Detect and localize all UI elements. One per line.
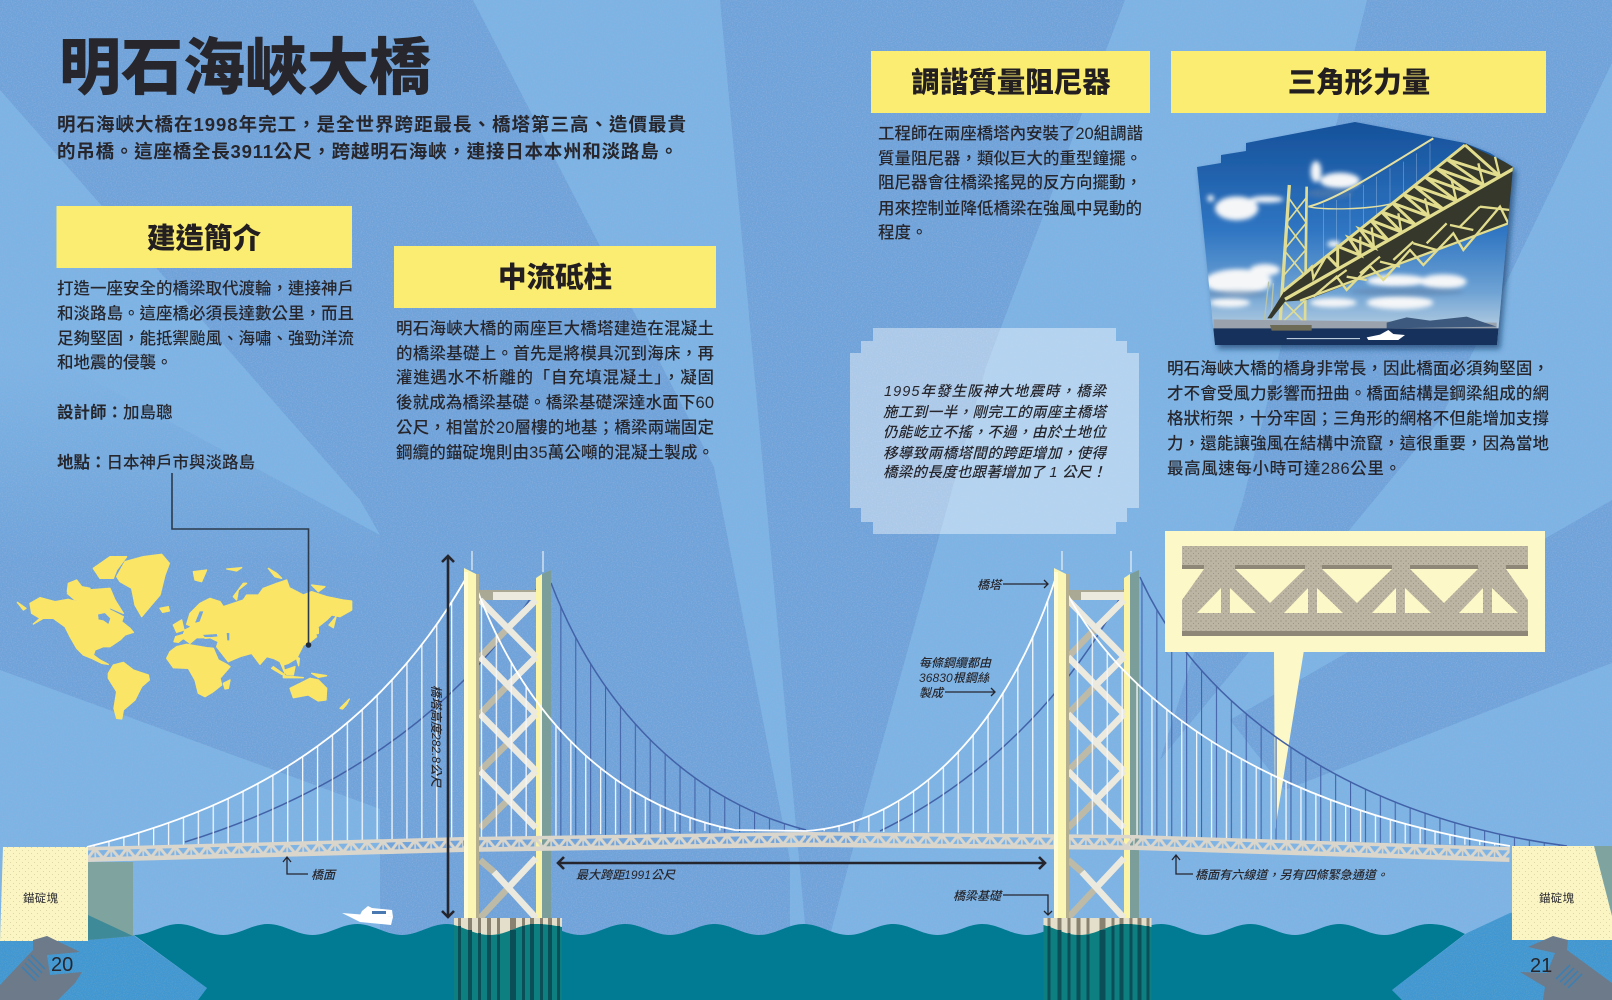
heading: 調諧質量阻尼器: 調諧質量阻尼器 <box>911 67 1111 99</box>
tower height arrow <box>442 556 454 917</box>
land: right shore <box>1392 900 1612 1000</box>
heading: 調諧質量阻尼器 <box>871 51 1150 113</box>
truss detail callout <box>1165 531 1545 652</box>
earthquake note panel: 橋梁的長度也跟著增加了 1 公尺！ <box>883 464 1106 481</box>
page number 21: 21 <box>1530 955 1552 977</box>
text: 建造簡介: 地點：日本神戶市與淡路島 <box>57 453 255 472</box>
bridge deck truss <box>87 832 1510 862</box>
left anchor block <box>0 847 88 941</box>
earthquake note panel: 1995年發生阪神大地震時，橋梁 <box>884 383 1108 400</box>
water <box>134 924 1465 1000</box>
right pier <box>1044 918 1152 1000</box>
foundation label and arrow: 橋梁基礎 <box>953 889 1003 903</box>
intro text <box>57 114 686 162</box>
earthquake note panel: 施工到一半，剛完工的兩座主橋塔 <box>883 404 1108 421</box>
text: 調諧質量阻尼器: 質量阻尼器，類似巨大的重型鐘擺。 <box>878 149 1142 168</box>
photo of the bridge <box>1193 117 1520 350</box>
text: 調諧質量阻尼器: 工程師在兩座橋塔內安裝了20組調諧 <box>878 123 1143 143</box>
tower height label: 橋塔高度282.8公尺 <box>429 685 443 788</box>
heading: 三角形力量: 三角形力量 <box>1288 67 1430 99</box>
cable label and arrow <box>919 656 995 700</box>
text: 建造簡介: 設計師：加島聰 <box>57 402 173 422</box>
heading: 建造簡介: 建造簡介 <box>147 222 261 255</box>
wrench right <box>1520 936 1612 1000</box>
heading: 三角形力量 <box>1171 51 1546 113</box>
text: 建造簡介: 打造一座安全的橋梁取代渡輪，連接神戶 <box>57 278 354 298</box>
text: 調諧質量阻尼器 <box>878 123 1143 242</box>
text: 建造簡介: 足夠堅固，能抵禦颱風、海嘯、強勁洋流 <box>57 328 354 348</box>
right anchor block: 錨碇塊 <box>1539 891 1574 905</box>
left tower front column <box>464 551 479 918</box>
left anchor side face <box>88 862 133 940</box>
left anchor block: 錨碇塊 <box>23 891 58 905</box>
main cables and hangers <box>87 580 1510 847</box>
right anchor block <box>1512 846 1612 940</box>
earthquake note panel <box>850 328 1139 534</box>
text: 三角形力量: 才不會受風力影響而扭曲。橋面結構是鋼梁組成的網 <box>1167 383 1549 403</box>
text: 三角形力量: 格狀桁架，十分牢固；三角形的網格不但能增加支撐 <box>1167 409 1549 428</box>
deck lanes label and arrow <box>1172 855 1388 882</box>
left tower back column and lattice <box>479 551 551 918</box>
earthquake note panel: 仍能屹立不搖，不過，由於土地位 <box>883 424 1108 441</box>
text: 中流砥柱: 的橋梁基礎上。首先是將模具沉到海床，再 <box>396 344 714 363</box>
earthquake note panel: 移導致兩橋塔間的跨距增加，使得 <box>883 445 1108 462</box>
heading: 中流砥柱 <box>394 246 716 308</box>
heading: 中流砥柱: 中流砥柱 <box>498 261 612 294</box>
deck lanes label and arrow: 橋面有六線道，另有四條緊急通道。 <box>1195 868 1388 882</box>
intro text: 的吊橋。這座橋全長3911公尺，跨越明石海峽，連接日本本州和淡路島。 <box>57 141 678 162</box>
land: left shore <box>0 935 207 1000</box>
right tower front column <box>1054 551 1069 918</box>
text: 中流砥柱: 後就成為橋梁基礎。橋梁基礎深達水面下60 <box>396 393 714 412</box>
text: 中流砥柱: 公尺，相當於20層樓的地基；橋梁兩端固定 <box>396 417 714 437</box>
tower label and arrow: 橋塔 <box>977 578 1003 592</box>
text: 中流砥柱 <box>396 319 714 462</box>
leader line from location to Japan <box>172 473 311 648</box>
text: 調諧質量阻尼器: 用來控制並降低橋梁在強風中晃動的 <box>878 199 1142 218</box>
cable label and arrow: 每條鋼纜都由 <box>919 656 992 670</box>
tower label and arrow <box>977 578 1048 592</box>
deck label and arrow <box>283 857 337 882</box>
world map <box>17 554 352 719</box>
intro text: 明石海峽大橋在1998年完工，是全世界跨距最長、橋塔第三高、造價最貴 <box>57 114 686 135</box>
text: 中流砥柱: 鋼纜的錨碇塊則由35萬公噸的混凝土製成。 <box>396 443 714 462</box>
callout tail <box>1274 650 1304 830</box>
text: 三角形力量: 明石海峽大橋的橋身非常長，因此橋面必須夠堅固， <box>1167 359 1549 378</box>
text: 調諧質量阻尼器: 程度。 <box>878 223 928 242</box>
wrench left <box>0 936 82 1000</box>
text: 三角形力量: 最高風速每小時可達286公里。 <box>1167 459 1401 478</box>
page number 20: 20 <box>51 954 73 976</box>
text: 建造簡介: 和地震的侵襲。 <box>57 353 172 372</box>
right tower back column and lattice <box>1067 551 1139 918</box>
main span arrow <box>558 857 1045 869</box>
text: 中流砥柱: 灌進遇水不析離的「自充填混凝土」，凝固 <box>396 368 714 387</box>
boat <box>342 906 393 925</box>
left pier <box>454 918 562 1000</box>
text: 調諧質量阻尼器: 阻尼器會往橋梁搖晃的反方向擺動， <box>878 172 1142 192</box>
heading: 建造簡介 <box>56 206 352 268</box>
text: 三角形力量 <box>1167 359 1549 478</box>
back cable and hangers <box>185 575 1567 847</box>
text: 建造簡介 <box>57 278 354 472</box>
text: 建造簡介: 和淡路島。這座橋必須長達數公里，而且 <box>57 303 354 323</box>
cable label and arrow: 製成 <box>919 686 945 700</box>
text: 三角形力量: 力，還能讓強風在結構中流竄，這很重要，因為當地 <box>1167 433 1549 453</box>
deck label and arrow: 橋面 <box>311 868 337 882</box>
foundation label and arrow <box>953 889 1052 915</box>
main span label: 最大跨距1991公尺 <box>576 868 676 882</box>
cable label and arrow: 36830根鋼絲 <box>919 671 990 685</box>
text: 中流砥柱: 明石海峽大橋的兩座巨大橋塔建造在混凝土 <box>396 319 714 338</box>
title: 明石海峽大橋 <box>59 34 431 103</box>
